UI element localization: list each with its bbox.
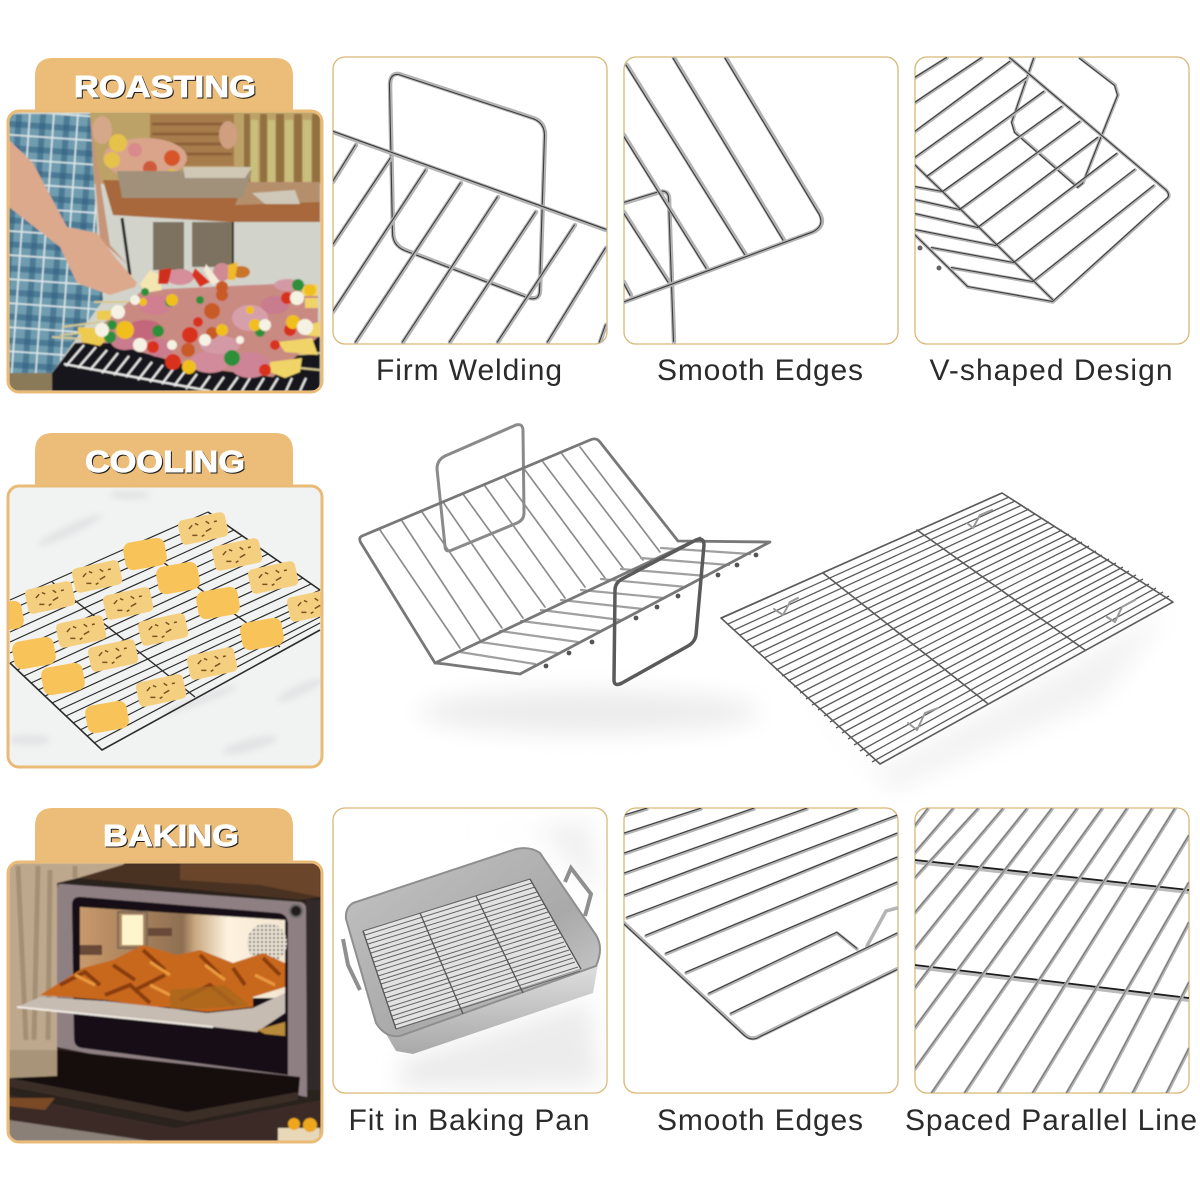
panel: smooth edges bottom [624, 808, 898, 1093]
label: roasting [35, 58, 293, 112]
rack upper side ribs [380, 447, 660, 648]
product shot: flat cooling rack [721, 493, 1173, 790]
rack close-up: v-shape [914, 58, 1169, 302]
label: baking: BAKING [103, 818, 239, 853]
rack close-up: welding [332, 74, 606, 342]
caption: v-shaped design: V-shaped Design [930, 354, 1172, 387]
back handle [437, 425, 524, 551]
photo: cookies cooling on rack [0, 486, 338, 767]
caption: fit in baking pan: Fit in Baking Pan [348, 1104, 590, 1137]
label: baking [35, 808, 293, 862]
rack close-up: flat edges [624, 808, 897, 1039]
underside pegs [544, 553, 758, 668]
photo: roasting skewers on grill [8, 111, 322, 392]
caption: firm welding: Firm Welding [376, 354, 562, 387]
photo: croissants in oven [8, 862, 322, 1142]
product shot: v-shaped roasting rack [360, 425, 770, 734]
panel: firm welding [332, 57, 607, 344]
caption: smooth edges bottom: Smooth Edges [657, 1104, 863, 1137]
panel: fit in baking pan [333, 808, 607, 1093]
rack lower side ribs [460, 548, 750, 664]
caption: smooth edges top: Smooth Edges [657, 354, 863, 387]
front handle [614, 539, 704, 684]
label: cooling: COOLING [85, 444, 245, 479]
panel: spaced parallel line [914, 808, 1189, 1093]
caption: spaced parallel line: Spaced Parallel Line [905, 1104, 1197, 1137]
label: cooling [35, 433, 293, 487]
panel: v-shaped design [914, 57, 1189, 344]
panel: smooth edges top [623, 57, 898, 344]
rack outer frame [360, 439, 770, 674]
rack close-up: smooth edge [623, 58, 822, 342]
rack close-up: parallel wires [914, 809, 1189, 1093]
label: roasting: ROASTING [74, 69, 256, 104]
baking pan with rack [343, 820, 600, 1090]
